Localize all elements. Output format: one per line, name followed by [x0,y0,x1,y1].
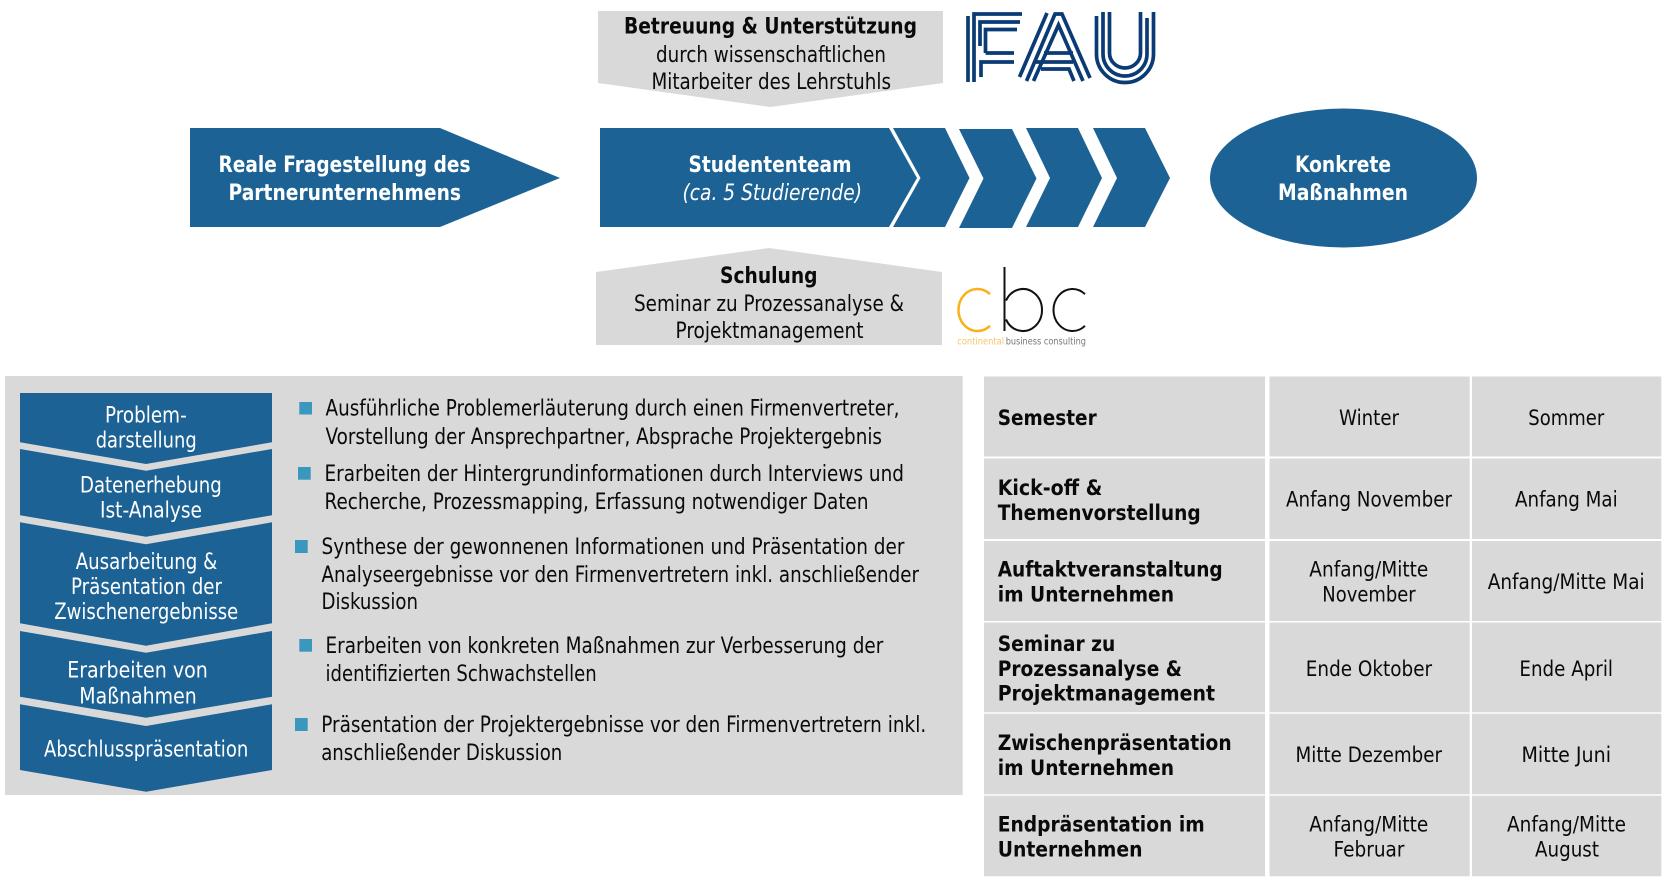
chevron: Ausarbeitung [20,522,272,646]
chevron: Erarbeiten von Massnahmen: Erarbeiten von [67,659,208,684]
ellipse: concrete measures [1210,108,1477,248]
arrow: student team with chevrons [600,128,1170,228]
panel: supervision arrow: Betreuung & Unterstützung [624,14,917,40]
bullet: step 5 [295,713,926,766]
row: Zwischenpraesentation: Mitte Dezember [1296,743,1442,767]
bullet: step 2 [298,462,904,515]
ellipse: concrete measures: Maßnahmen [1278,181,1408,206]
panel: supervision arrow: Mitarbeiter des Lehrstuhls [652,70,891,95]
row: Auftaktveranstaltung [984,541,1661,621]
panel: supervision arrow: durch wissenschaftlichen [656,43,886,68]
row: Semester: Semester [998,406,1097,430]
chevron: Problemdarstellung: Problem- [105,404,187,429]
row: Kick-off: Anfang Mai [1515,488,1618,512]
arrow: student team with chevrons: (ca. 5 Studierende) [682,181,862,206]
bullet: step 1: Vorstellung der Ansprechpartner, Absprache Projektergebnis [326,425,882,450]
row: Endpraesentation: Februar [1334,838,1405,862]
row: Auftaktveranstaltung: November [1322,583,1416,607]
panel: training arrow: Schulung [720,264,818,289]
row: Auftaktveranstaltung: Anfang/Mitte [1309,558,1428,582]
row: Seminar: Ende April [1519,657,1613,681]
chevron: Datenerhebung [20,449,272,537]
table: schedule per semester [984,376,1661,876]
icon: FAU logo [968,12,1154,82]
row: Zwischenpraesentation: im Unternehmen [998,756,1174,780]
row: Seminar: Prozessanalyse & [998,657,1182,681]
chevron: Datenerhebung: Datenerhebung [80,474,222,499]
arrow: real question of the partner company [190,128,560,227]
row: Kick-off: Anfang November [1286,488,1452,512]
panel: project phases [5,376,963,795]
row: Seminar: Ende Oktober [1306,657,1432,681]
bullet: step 1: Ausführliche Problemerläuterung durch einen Firmenvertreter, [326,397,900,422]
bullet: step 4 [299,634,884,687]
chevron: Ausarbeitung: Präsentation der [71,575,223,600]
chevron: Abschlusspraesentation [20,704,272,792]
bullet: step 2: Recherche, Prozessmapping, Erfassung notwendiger Daten [324,490,868,515]
chevron: Datenerhebung: Ist-Analyse [100,499,202,524]
row: Semester: Winter [1339,406,1399,430]
chevron: Ausarbeitung: Ausarbeitung & [76,550,217,575]
bullet: step 3: Diskussion [322,590,418,615]
bullet: step 5: anschließender Diskussion [321,741,562,766]
row: Semester [984,376,1661,456]
bullet: step 4: Erarbeiten von konkreten Maßnahmen zur Verbesserung der [326,634,884,659]
chevron: Problemdarstellung: darstellung [96,428,197,453]
arrow: real question of the partner company: Partnerunternehmens [228,181,461,206]
row: Zwischenpraesentation: Mitte Juni [1522,743,1611,767]
panel: training arrow: Seminar zu Prozessanalyse & [634,292,904,317]
chevron: Abschlusspraesentation: Abschlusspräsentation [44,738,248,763]
row: Endpraesentation: Anfang/Mitte [1507,813,1626,837]
row: Endpraesentation: August [1535,838,1599,862]
bullet: step 2: Erarbeiten der Hintergrundinformationen durch Interviews und [324,462,904,487]
row: Endpraesentation [984,796,1661,876]
row: Seminar: Projektmanagement [998,682,1215,706]
row: Seminar: Seminar zu [998,632,1115,656]
panel: supervision arrow [598,11,943,107]
icon: cbc logo: business consulting [1006,336,1086,347]
bullet: step 1 [299,397,900,450]
row: Kick-off: Themenvorstellung [998,501,1201,525]
row: Zwischenpraesentation [984,714,1661,794]
chevron: Problemdarstellung [20,393,272,464]
bullet: step 5: Präsentation der Projektergebnisse vor den Firmenvertretern inkl. [321,713,926,738]
icon: cbc logo [957,267,1086,347]
bullet: step 3 [295,535,920,615]
row: Kick-off [984,458,1661,539]
row: Zwischenpraesentation: Zwischenpräsentation [998,731,1232,755]
row: Semester: Sommer [1528,406,1605,430]
row: Endpraesentation: Anfang/Mitte [1309,813,1428,837]
bullet: step 3: Synthese der gewonnenen Informationen und Präsentation der [322,535,905,560]
row: Auftaktveranstaltung: Auftaktveranstaltung [998,558,1223,582]
panel: training arrow [596,248,942,345]
row: Auftaktveranstaltung: Anfang/Mitte Mai [1488,570,1645,594]
bullet: step 3: Analyseergebnisse vor den Firmenvertretern inkl. anschließender [322,563,920,588]
row: Kick-off: Kick-off & [998,476,1102,500]
icon: cbc logo: continental [957,336,1004,347]
row: Endpraesentation: Unternehmen [998,838,1142,862]
arrow: student team with chevrons: Studententeam [688,153,852,178]
chevron: Erarbeiten von Massnahmen: Maßnahmen [79,684,197,709]
row: Endpraesentation: Endpräsentation im [998,813,1205,837]
ellipse: concrete measures: Konkrete [1295,153,1391,178]
panel: training arrow: Projektmanagement [676,319,864,344]
chevron: Ausarbeitung: Zwischenergebnisse [54,600,238,625]
chevron: Erarbeiten von Massnahmen [20,631,272,718]
row: Seminar [984,622,1661,712]
bullet: step 4: identifizierten Schwachstellen [326,662,597,687]
row: Auftaktveranstaltung: im Unternehmen [998,583,1174,607]
arrow: real question of the partner company: Reale Fragestellung des [218,153,470,178]
